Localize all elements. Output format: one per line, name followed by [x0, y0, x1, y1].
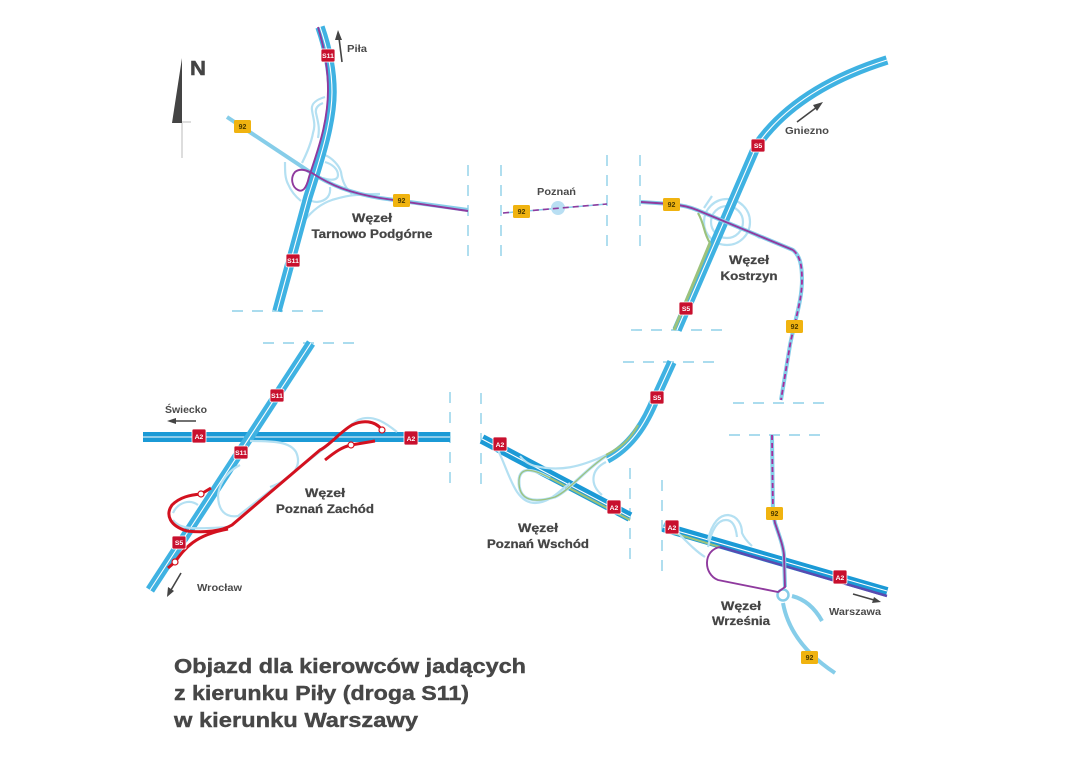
- label: Węzeł Tarnowo Podgórne: Tarnowo Podgórne: [312, 229, 432, 241]
- badge 92: 92: [668, 202, 675, 209]
- badge S11: [270, 389, 284, 402]
- junction: Kostrzyn: [641, 60, 887, 400]
- Poznań city section: 92: [518, 209, 525, 216]
- badge S11: S11: [235, 450, 247, 457]
- label: Węzeł Poznań Wschód: Poznań Wschód: [487, 539, 589, 551]
- arrow: Gniezno: [797, 102, 823, 122]
- detour route: [707, 435, 785, 592]
- badge 92: [766, 507, 783, 520]
- label: Węzeł Września: Września: [712, 616, 771, 628]
- label: Węzeł Poznań Wschód: [487, 523, 589, 551]
- label: Węzeł Poznań Zachód: Węzeł: [305, 488, 346, 500]
- badge A2: [493, 437, 507, 451]
- detour route: [292, 27, 468, 211]
- ramps: [704, 196, 760, 245]
- title: [173, 656, 526, 732]
- junction: Poznań Wschód: [482, 362, 672, 520]
- badge 92: 92: [239, 124, 246, 131]
- label: Wrocław: Wrocław: [197, 583, 242, 594]
- junction: Poznań Zachód: [143, 343, 450, 590]
- badge 92: [234, 120, 251, 133]
- badge S11: [321, 49, 335, 62]
- badge 92: 92: [791, 324, 798, 331]
- ramps: [498, 450, 606, 503]
- badge S11: S11: [287, 258, 299, 265]
- label: Węzeł Kostrzyn: Kostrzyn: [720, 271, 778, 283]
- north arrow: [172, 58, 206, 158]
- ramps: [173, 418, 397, 528]
- badge 92: [663, 198, 680, 211]
- badge 92: [393, 194, 410, 207]
- road 92 east: [641, 202, 802, 400]
- badge S11: S11: [322, 53, 334, 60]
- badge A2: [404, 431, 418, 445]
- title: z kierunku Piły (droga S11): [174, 683, 469, 705]
- label: Gniezno: Gniezno: [785, 126, 829, 137]
- label: Węzeł Kostrzyn: [720, 255, 778, 283]
- badge 92: 92: [806, 655, 813, 662]
- label: Węzeł Tarnowo Podgórne: [312, 213, 432, 241]
- road A2 west: [143, 432, 450, 442]
- badge A2: A2: [195, 434, 204, 441]
- badge A2: A2: [668, 525, 677, 532]
- title: Objazd dla kierowców jadących: [174, 656, 526, 678]
- badge A2: A2: [496, 442, 505, 449]
- arrow: Świecko: [167, 418, 196, 424]
- road A2 centre: [482, 439, 630, 520]
- badge S11: [234, 446, 248, 459]
- road A2 east: [663, 527, 887, 596]
- badge S5: S5: [175, 540, 183, 547]
- badge 92: [801, 651, 818, 664]
- road S5 upper section: [674, 60, 887, 330]
- badge 92: 92: [398, 198, 405, 205]
- badge S11: S11: [271, 393, 283, 400]
- badge S5: [679, 302, 693, 315]
- arrow: Piła: [335, 30, 342, 62]
- badge 92: [786, 320, 803, 333]
- label: Węzeł Września: Węzeł: [721, 601, 762, 613]
- badge A2: [607, 500, 621, 514]
- label: Piła: Piła: [347, 44, 367, 55]
- badge A2: A2: [836, 575, 845, 582]
- badge S5: S5: [653, 395, 661, 402]
- road S11 north section: [277, 27, 332, 311]
- label: Węzeł Poznań Wschód: Węzeł: [518, 523, 559, 535]
- badge S5: [650, 391, 664, 404]
- badge A2: A2: [610, 505, 619, 512]
- road S5 lower section: [606, 362, 672, 459]
- north arrow: N: [190, 58, 206, 80]
- road 92 south: [778, 590, 835, 673]
- badge S5: [172, 536, 186, 549]
- badge A2: [192, 429, 206, 443]
- arrow: Warszawa: [853, 594, 881, 603]
- badge S11: [286, 254, 300, 267]
- badge A2: A2: [407, 436, 416, 443]
- road S11 south section: [150, 343, 311, 590]
- red detour route: [168, 422, 385, 568]
- Poznań city section: Poznań: [537, 187, 576, 198]
- label: Warszawa: Warszawa: [829, 607, 881, 618]
- gap markers: [232, 155, 826, 573]
- road 92 west: [227, 117, 468, 210]
- junction: Tarnowo Podgórne: [227, 27, 468, 311]
- title: w kierunku Warszawy: [173, 710, 419, 732]
- ramps: [678, 515, 752, 557]
- arrow: Wrocław: [167, 573, 181, 597]
- label: Węzeł Kostrzyn: Węzeł: [729, 255, 770, 267]
- Poznań city section: [503, 187, 607, 218]
- badge A2: [833, 570, 847, 584]
- label: Świecko: Świecko: [165, 403, 207, 416]
- detour route: [641, 202, 802, 400]
- badge S5: [751, 139, 765, 152]
- ramps: [285, 97, 380, 220]
- label: Węzeł Poznań Zachód: Poznań Zachód: [276, 504, 374, 516]
- badge A2: [665, 520, 679, 534]
- badge S5: S5: [682, 306, 690, 313]
- label: Węzeł Poznań Zachód: [276, 488, 374, 516]
- junction: Września: [663, 435, 887, 673]
- badge S5: S5: [754, 143, 762, 150]
- badge 92: 92: [771, 511, 778, 518]
- label: Węzeł Września: [712, 601, 771, 628]
- label: Węzeł Tarnowo Podgórne: Węzeł: [352, 213, 393, 225]
